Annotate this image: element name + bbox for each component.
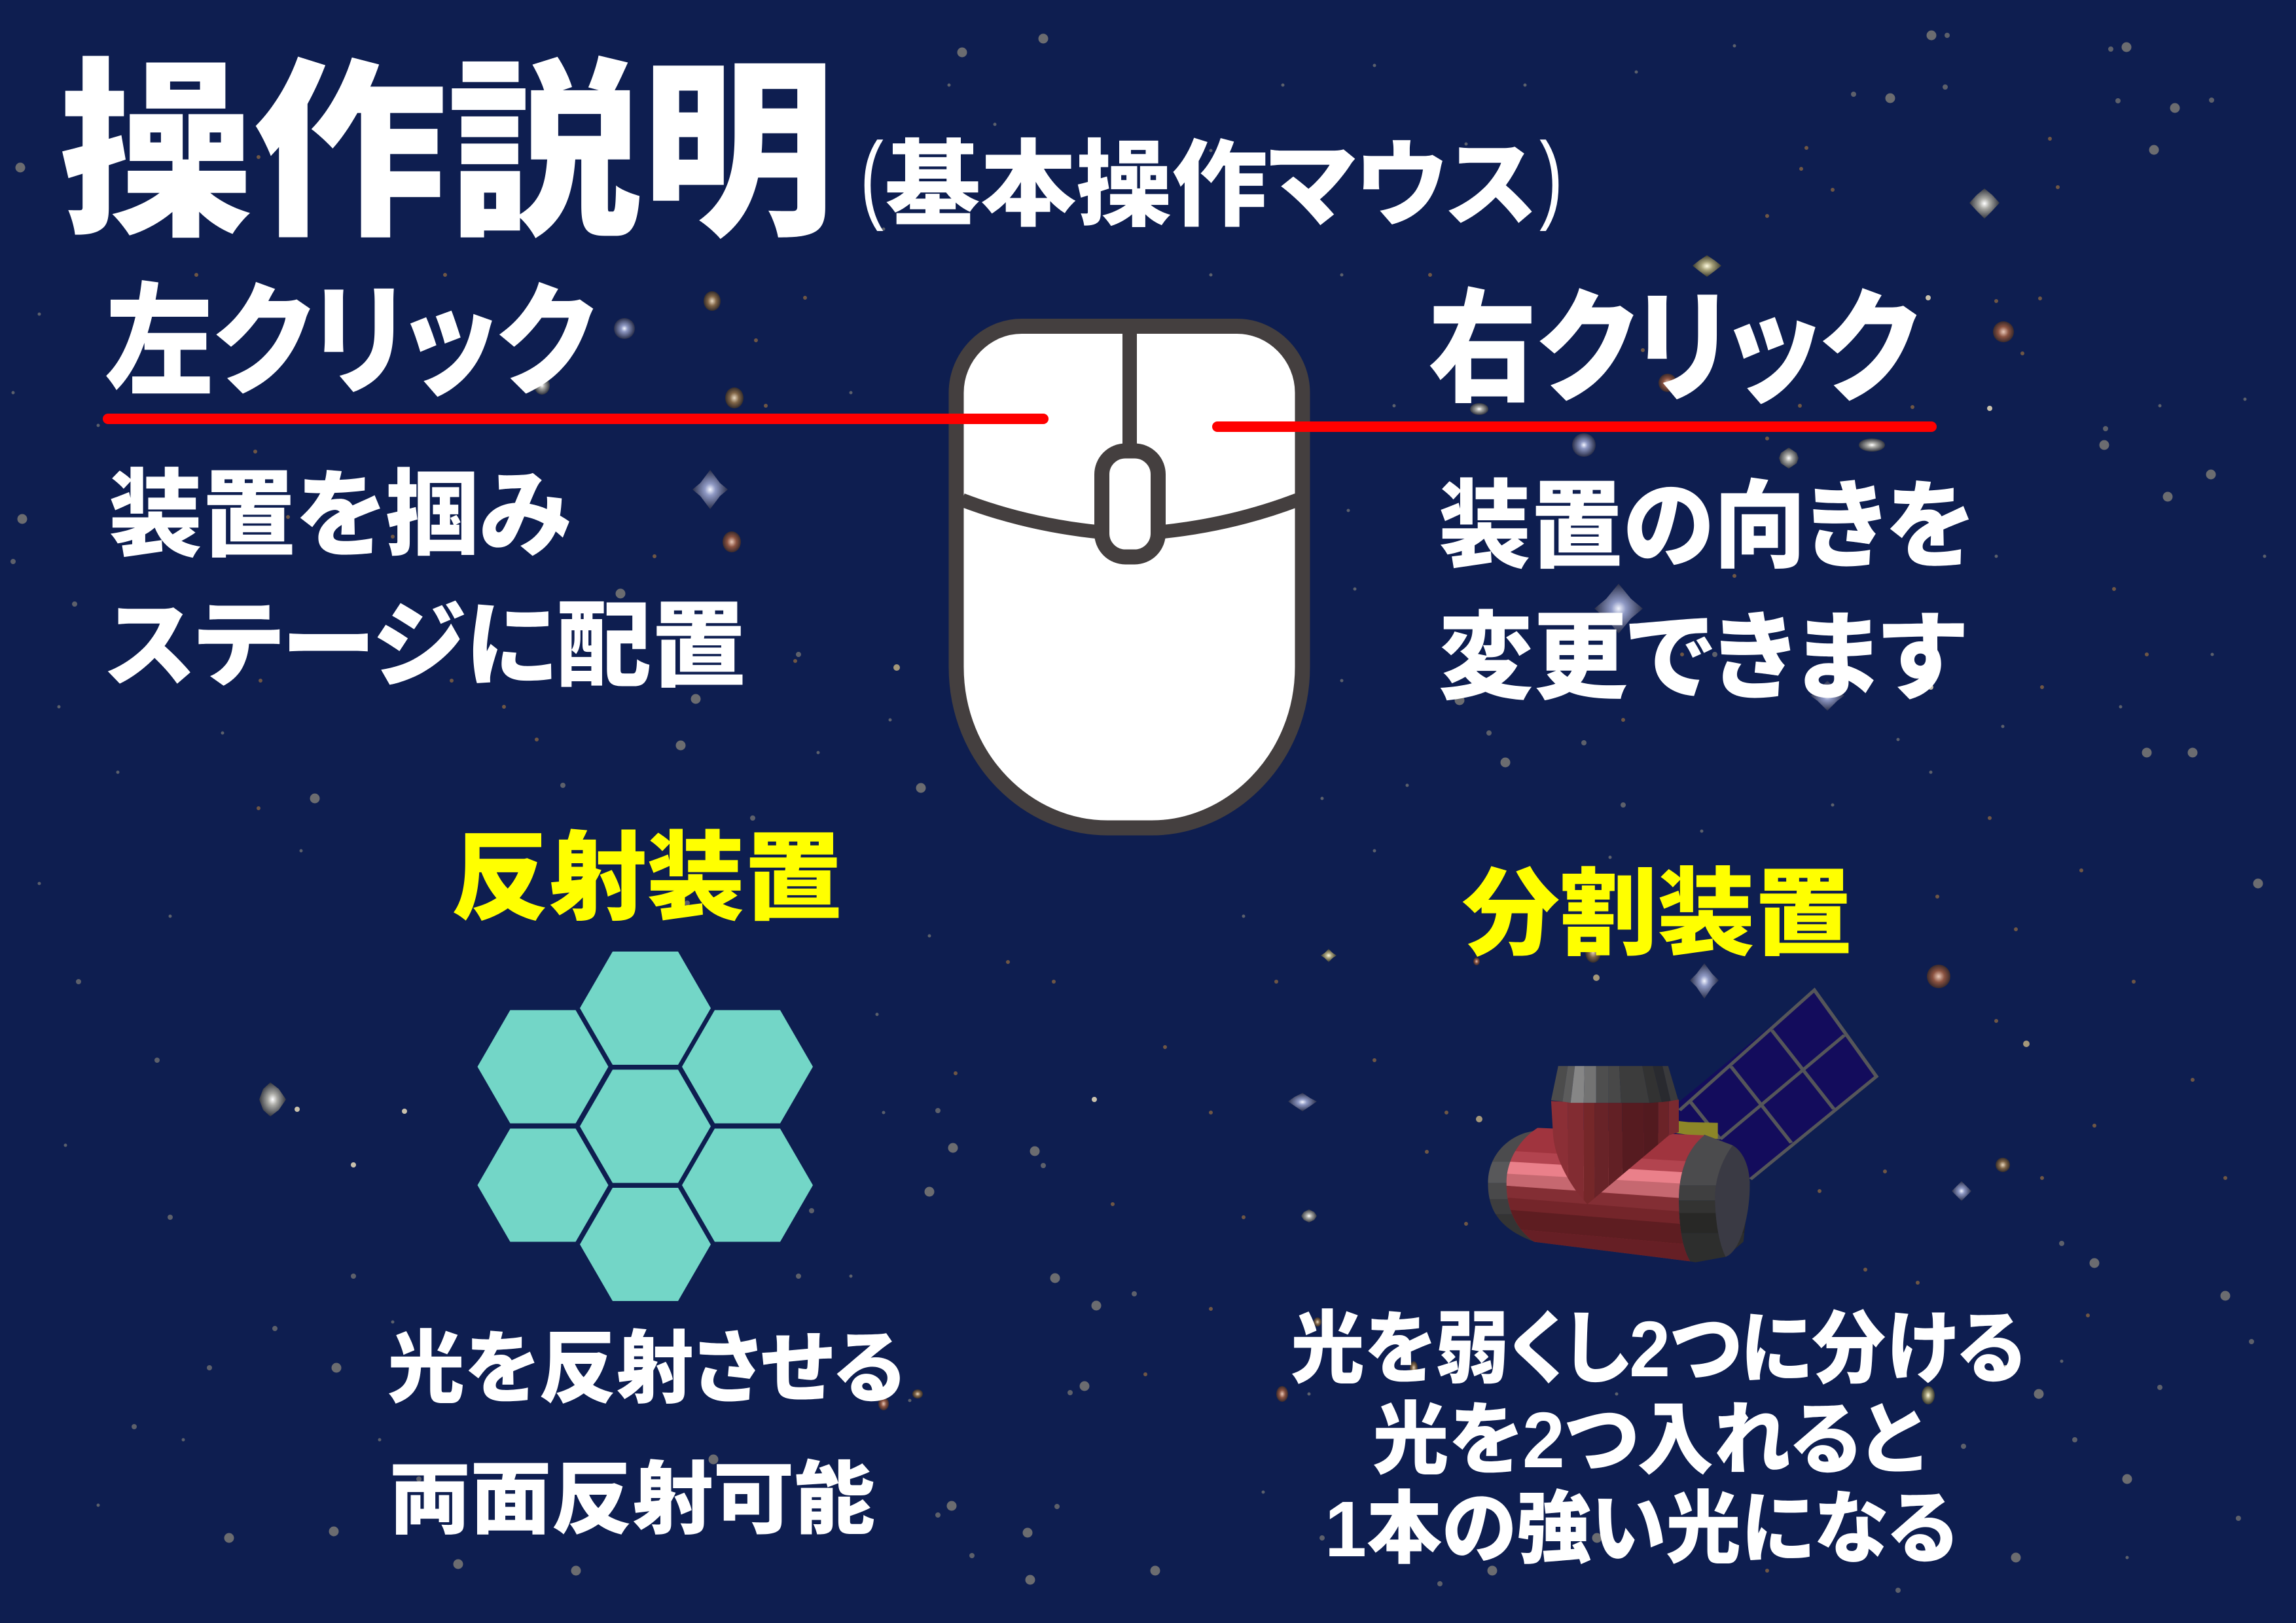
reflector description: 両面反射可能 [389, 1455, 875, 1544]
right click description: 変更できます [1439, 605, 1965, 712]
reflector description: 光を反射させる [387, 1324, 905, 1413]
mouse icon [956, 326, 1302, 828]
subtitle: basic mouse operation: ( [860, 122, 884, 232]
splitter heading: 分割装置 [1462, 861, 1852, 967]
left click description [106, 462, 746, 699]
splitter description: 光を弱くし2つに分ける [1291, 1304, 2025, 1393]
splitter description [1291, 1304, 2025, 1573]
left click description: 装置を掴み [109, 462, 571, 569]
subtitle: basic mouse operation: 基本操作マウス [885, 133, 1537, 238]
sparkles [692, 470, 728, 509]
icon: hexagonal reflector [478, 952, 813, 1301]
left click heading: 左クリック [105, 275, 594, 410]
subtitle: basic mouse operation: ) [1539, 122, 1563, 232]
left click description: ステージに配置 [106, 594, 746, 699]
splitter description: 光を2つ入れると [1372, 1395, 1924, 1484]
right click red leader line [1217, 421, 1931, 432]
right click heading: 右クリック [1428, 280, 1918, 418]
reflector description [387, 1324, 905, 1544]
icon: splitter device [1481, 990, 1876, 1267]
right click description [1439, 473, 1974, 712]
right click description: 装置の向きを [1439, 473, 1974, 580]
splitter description: 1本の強い光になる [1325, 1484, 1957, 1573]
reflector heading: 反射装置 [451, 825, 842, 933]
title: 操作説明 [59, 46, 835, 260]
left click red leader line [108, 414, 1043, 424]
